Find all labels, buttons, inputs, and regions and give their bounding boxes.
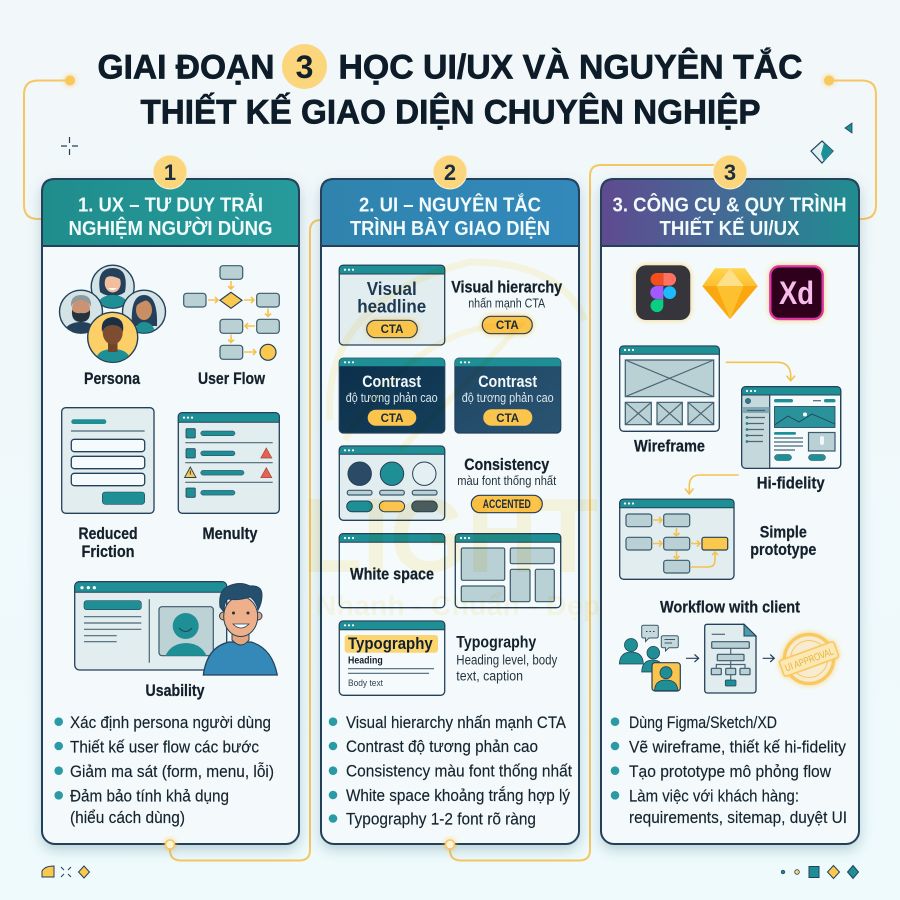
card: typography: Body text	[348, 678, 383, 689]
card: visual headline: CTA	[381, 324, 403, 336]
panel 1: UX	[42, 179, 299, 844]
card: consistency	[339, 446, 445, 520]
card: typography	[339, 621, 445, 695]
label: Reduced Friction: Reduced	[78, 524, 138, 543]
text: consistency: Consistency	[464, 455, 550, 474]
decorative icons bottom left	[42, 866, 90, 878]
card: contrast medium: Contrast	[478, 372, 537, 391]
text: typography: text, caption	[456, 668, 523, 683]
card: contrast dark: CTA	[381, 413, 403, 425]
card: visual headline: Visual	[367, 279, 417, 299]
title number badge: 3	[296, 49, 313, 85]
arrow: wireframe to hi-fidelity	[726, 362, 795, 381]
arrow: document to approval	[763, 654, 774, 662]
bullet list 2: Visual hierarchy nhấn mạnh CTA	[346, 714, 566, 732]
label: Usability: Usability	[146, 681, 205, 700]
icon: persona group	[60, 265, 166, 363]
bullet list 3: Làm việc với khách hàng:	[629, 788, 799, 806]
text: typography: Heading level, body	[456, 652, 558, 667]
step badges	[153, 155, 747, 189]
card: layout grid	[455, 534, 561, 608]
label: Reduced Friction: Friction	[82, 542, 134, 561]
label: Simple prototype: prototype	[750, 540, 816, 559]
bullet list 2	[329, 714, 572, 828]
panel 1 header: 1. UX – TƯ DUY TRẢI	[78, 194, 263, 216]
label: Reduced Friction	[78, 524, 138, 561]
label: Simple prototype	[750, 522, 816, 559]
icon: Adobe XD	[770, 266, 823, 319]
panel 2 header: TRÌNH BÀY GIAO DIỆN	[350, 216, 550, 240]
text: visual hierarchy: Visual hierarchy	[451, 278, 563, 297]
stamp: UI approval	[779, 634, 839, 684]
text: consistency	[457, 455, 557, 513]
label: Wireframe: Wireframe	[634, 437, 705, 456]
bullet list 1: Xác định persona người dùng	[70, 714, 271, 732]
stamp: UI approval: UI APPROVAL	[784, 646, 836, 674]
icon: client team	[619, 625, 680, 691]
watermark: LIGHT logo: Nhanh - Chuẩn - Đẹp	[316, 590, 600, 621]
card: visual headline: headline	[357, 296, 426, 316]
decorative icons bottom right	[781, 866, 858, 878]
label: Persona: Persona	[84, 369, 140, 388]
card: contrast medium: độ tương phản cao	[462, 391, 554, 405]
title	[98, 44, 802, 132]
bullet list 1: (hiểu cách dùng)	[70, 809, 185, 827]
bullet list 2: Typography 1-2 font rõ ràng	[346, 810, 536, 828]
watermark: LIGHT logo	[302, 262, 600, 621]
card: visual headline	[339, 265, 445, 345]
wireframe window	[620, 346, 719, 431]
arrow: team to document	[686, 654, 699, 662]
bullet list 3: Tạo prototype mô phỏng flow	[629, 763, 831, 781]
icon: Sketch	[702, 268, 758, 319]
bullet list 3: Dùng Figma/Sketch/XD	[629, 714, 777, 732]
title number badge	[282, 44, 327, 89]
bullet list 2: Contrast độ tương phản cao	[346, 738, 538, 756]
icon: Adobe XD: Xd	[779, 275, 814, 311]
bullet list 1	[54, 714, 274, 827]
label: Workflow with client: Workflow with client	[660, 598, 800, 617]
text: visual hierarchy: CTA	[496, 320, 519, 332]
panel 3: tools	[601, 179, 859, 844]
icon: usability window and smiling user	[75, 582, 277, 677]
text: typography: Typography	[456, 632, 537, 651]
panel 3 header: 3. CÔNG CỤ & QUY TRÌNH	[612, 192, 846, 216]
panel 3 header	[601, 179, 859, 246]
card: contrast medium: CTA	[496, 413, 519, 425]
connector dots on panels	[166, 840, 454, 849]
icon: user flow	[184, 266, 279, 360]
panel 1 header: NGHIỆM NGƯỜI DÙNG	[68, 216, 272, 240]
bullet list 1: Đảm bảo tính khả dụng	[70, 788, 229, 806]
bullet list 3: Vẽ wireframe, thiết kế hi-fidelity	[629, 738, 847, 756]
arrow: hi-fidelity to prototype	[685, 475, 739, 494]
label: User Flow: User Flow	[198, 369, 266, 388]
label: Menulty: Menulty	[202, 524, 258, 543]
card: white space	[339, 534, 445, 608]
icon: Figma	[636, 265, 690, 320]
decorative sparkle top	[61, 123, 852, 163]
step badges: 3	[724, 160, 736, 185]
bullet list 1: Thiết kế user flow các bước	[70, 738, 259, 756]
card: contrast dark: độ tương phản cao	[346, 391, 438, 405]
label: Simple prototype: Simple	[760, 522, 807, 541]
hi-fidelity window	[742, 387, 841, 468]
title: THIẾT KẾ GIAO DIỆN CHUYÊN NGHIỆP	[140, 94, 760, 132]
card: contrast medium	[455, 358, 561, 433]
bullet list 2: Consistency màu font thống nhất	[346, 762, 572, 780]
step badges: 2	[444, 160, 456, 185]
panel 3 header: THIẾT KẾ UI/UX	[660, 217, 800, 240]
card: typography: Typography	[348, 634, 433, 653]
bullet list 3: requirements, sitemap, duyệt UI	[629, 809, 847, 827]
card: contrast dark	[339, 358, 445, 433]
prototype window	[620, 499, 734, 579]
watermark: LIGHT logo: LIGHT	[302, 477, 598, 595]
icon: reduced friction form	[62, 408, 154, 513]
panel 1 header	[42, 179, 299, 246]
text: visual hierarchy	[451, 278, 563, 334]
panel 2: UI	[321, 179, 579, 844]
title: GIAI ĐOẠN	[98, 48, 274, 86]
bullet list 1: Giảm ma sát (form, menu, lỗi)	[70, 762, 274, 781]
card: typography: Heading	[348, 654, 383, 666]
text: consistency: màu font thống nhất	[457, 474, 557, 488]
bullet list 2: White space khoảng trắng hợp lý	[346, 786, 571, 805]
panel 2 header	[321, 179, 579, 246]
text: visual hierarchy: nhấn mạnh CTA	[468, 297, 546, 311]
step badges: 1	[164, 160, 176, 185]
text: typography	[456, 632, 558, 683]
card: white space: White space	[350, 564, 434, 583]
label: Hi-fidelity: Hi-fidelity	[757, 473, 825, 492]
title: HỌC UI/UX VÀ NGUYÊN TẮC	[338, 48, 802, 86]
bullet list 3	[611, 714, 847, 827]
card: contrast dark: Contrast	[362, 372, 421, 391]
panel 2 header: 2. UI – NGUYÊN TẮC	[359, 192, 541, 216]
icon: sitemap document	[705, 624, 756, 693]
text: consistency: ACCENTED	[483, 499, 531, 511]
icon: menu list with warnings	[178, 413, 279, 513]
